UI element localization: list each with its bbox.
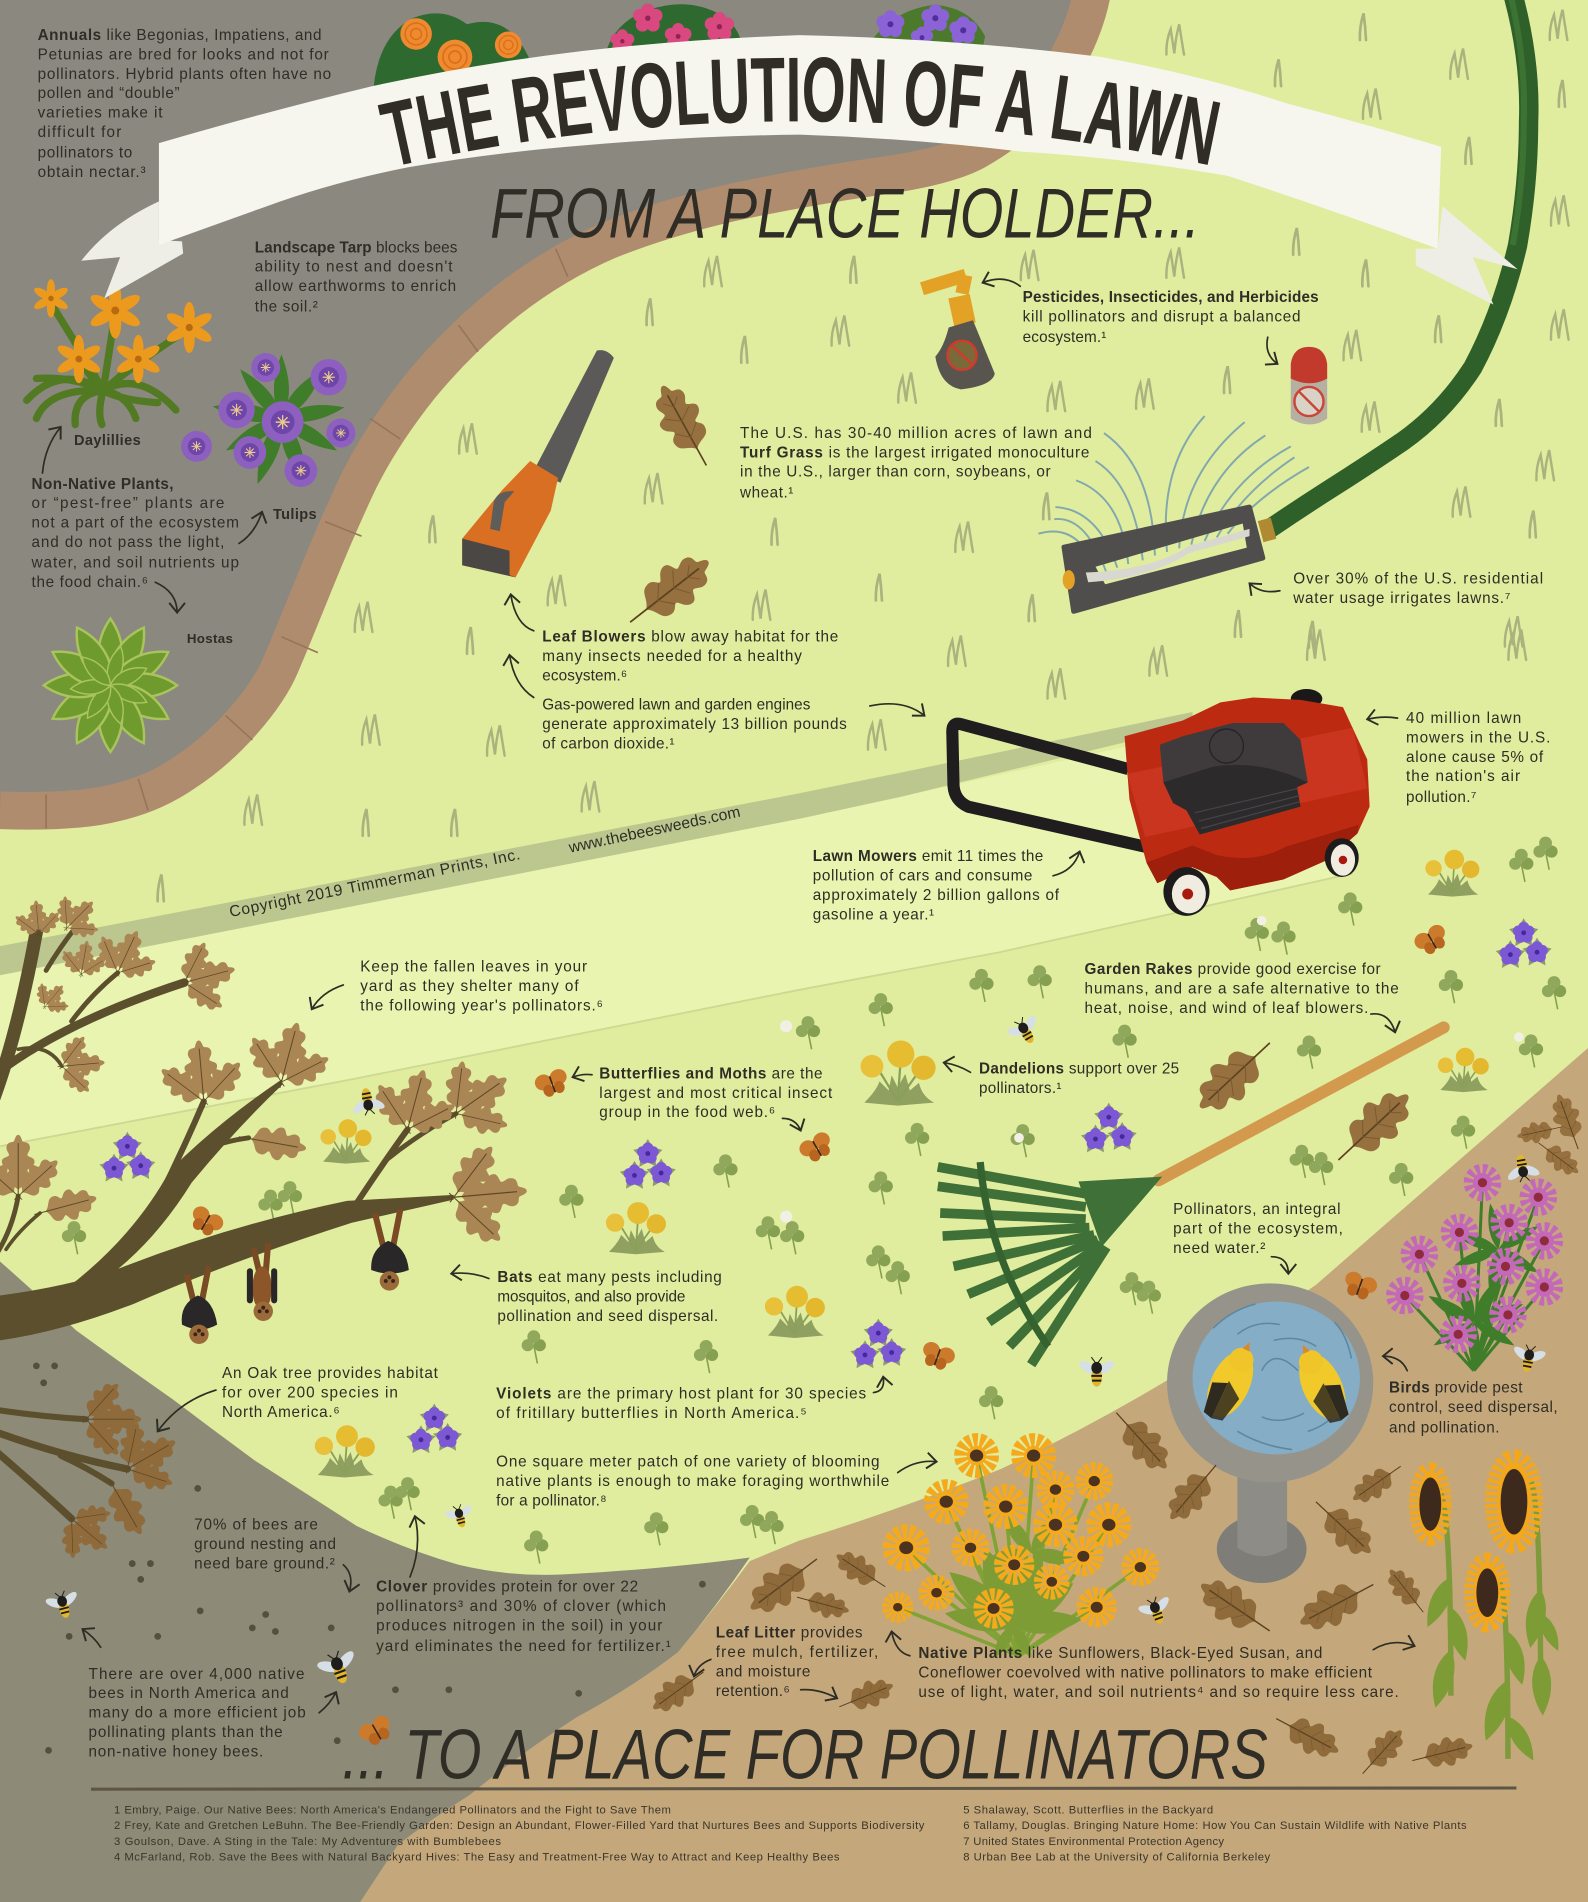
text: gas engines: generate approximately 13 billion pounds	[542, 716, 847, 733]
text: one square meter: for a pollinator.⁸	[496, 1492, 607, 1509]
footnotes right	[963, 1804, 1467, 1864]
text: leaf litter: free mulch, fertilizer,	[716, 1644, 878, 1661]
sunflower one	[1418, 1471, 1442, 1537]
grass tufts	[158, 10, 1569, 901]
icon: daylilies	[27, 279, 214, 425]
copyright text: Copyright 2019 Timmerman Prints, Inc.	[228, 846, 523, 921]
bird right	[1285, 1336, 1356, 1430]
text: pesticides	[1023, 289, 1319, 346]
bird left	[1196, 1334, 1267, 1427]
text: 40 million mowers: 40 million lawn	[1406, 710, 1521, 727]
footnotes left: 4 McFarland, Rob. Save the Bees with Natural Backyard Hives: The Easy and Treatment-Free Way to Attract and Keep Healthy Bees	[114, 1852, 840, 1864]
arrows	[42, 279, 1415, 1713]
text: leaf litter: and moisture	[716, 1663, 810, 1680]
fallen leaves on soil	[645, 1401, 1476, 1783]
text: native plants: Coneflower coevolved with native pollinators to make efficient	[918, 1665, 1373, 1682]
text: annuals: pollinators. Hybrid plants often have no	[38, 66, 331, 83]
tree limbs	[0, 1080, 454, 1340]
text: 40 million mowers: the nation's air	[1406, 768, 1520, 785]
text: landscape tarp: allow earthworms to enrich	[255, 278, 456, 295]
sprinkler knob	[1063, 570, 1075, 590]
text: lawn mowers: pollution of cars and consume	[813, 868, 1032, 885]
text: birds: and pollination.	[1389, 1420, 1499, 1437]
rake crossbar	[980, 1162, 1048, 1346]
text: non-native plants: not a part of the ecosystem	[32, 515, 239, 532]
text: butterflies and moths: largest and most critical insect	[599, 1085, 833, 1102]
text: clover: yard eliminates the need for fertilizer.¹	[376, 1638, 671, 1655]
text: garden rakes: heat, noise, and wind of leaf blowers.	[1085, 1000, 1368, 1017]
text: oak tree: North America.⁶	[222, 1404, 340, 1421]
text: lawn mowers: Lawn Mowers emit 11 times the	[813, 848, 1043, 865]
text: non-native plants: or “pest-free” plants are	[32, 495, 224, 512]
text: turf grass: The U.S. has 30-40 million acres of lawn and	[740, 425, 1092, 442]
text: native bees: There are over 4,000 native	[89, 1666, 304, 1683]
icon: sunflowers	[1418, 1462, 1564, 1764]
icon: purple petunias	[867, 4, 985, 49]
text: leaf litter	[716, 1625, 878, 1700]
label: hostas: Hostas	[187, 631, 233, 646]
text: gas engines: of carbon dioxide.¹	[542, 735, 675, 752]
clover patches	[62, 837, 1566, 1564]
bees	[42, 1011, 1548, 1690]
text: bats: mosquitos, and also provide	[497, 1289, 685, 1306]
rake head	[1078, 1177, 1162, 1247]
text: garden rakes: Garden Rakes provide good exercise for	[1085, 961, 1381, 978]
text: pollinators need water: Pollinators, an integral	[1173, 1201, 1341, 1218]
icon: coneflowers	[1394, 1172, 1555, 1371]
text: annuals: Annuals like Begonias, Impatiens, and	[38, 27, 321, 44]
icon: sprinkler	[1038, 416, 1309, 611]
footnotes left: 1 Embry, Paige. Our Native Bees: North America's Endangered Pollinators and the Fight to Save Them	[114, 1804, 671, 1816]
text: non-native plants	[31, 476, 239, 591]
text: pesticides: kill pollinators and disrupt a balanced	[1023, 308, 1300, 325]
text: pollinators need water: need water.²	[1173, 1240, 1265, 1257]
text: turf grass: in the U.S., larger than corn, soybeans, or	[740, 464, 1051, 481]
text: pollinators need water: part of the ecosystem,	[1173, 1221, 1343, 1238]
footnotes left: 2 Frey, Kate and Gretchen LeBuhn. The Bee-Friendly Garden: Design an Abundant, Flower-Filled Yard that Nurtures Bees and Supports Biodiversity	[114, 1820, 925, 1832]
text: ground nesting: ground nesting and	[194, 1536, 336, 1553]
text: ground nesting	[194, 1517, 336, 1572]
hose connector	[1258, 518, 1276, 542]
text: violets	[496, 1386, 867, 1422]
text: clover: pollinators³ and 30% of clover (which	[376, 1598, 666, 1615]
text: turf grass: wheat.¹	[739, 484, 793, 501]
footer rule	[91, 1788, 1516, 1789]
icon: pink impatiens	[604, 4, 742, 58]
bath pedestal	[1237, 1468, 1287, 1556]
footnotes left: 3 Goulson, Dave. A Sting in the Tale: My Adventures with Bumblebees	[114, 1836, 501, 1848]
text: birds: control, seed dispersal,	[1389, 1399, 1558, 1416]
text: native plants: Native Plants like Sunflowers, Black-Eyed Susan, and	[918, 1645, 1322, 1662]
text: native bees: non-native honey bees.	[89, 1743, 263, 1760]
text: ground nesting: need bare ground.²	[194, 1555, 335, 1572]
label: tulips: Tulips	[273, 507, 317, 523]
icon: oak tree	[0, 882, 534, 1576]
text: leaf blowers: ecosystem.⁶	[542, 667, 627, 684]
text: 40 million mowers: alone cause 5% of	[1406, 749, 1544, 766]
mower path band	[0, 712, 1193, 975]
mower handle	[952, 724, 1145, 847]
text: annuals	[38, 27, 331, 181]
text: gas engines	[542, 697, 847, 752]
text: turf grass	[739, 425, 1092, 501]
text: butterflies and moths: group in the food web.⁶	[599, 1104, 775, 1121]
text: 40 million mowers: pollution.⁷	[1406, 789, 1476, 806]
text: native plants: use of light, water, and soil nutrients⁴ and so require less care.	[918, 1684, 1399, 1701]
text: 40 million mowers	[1406, 710, 1550, 806]
violets	[99, 918, 1552, 1453]
text: non-native plants: water, and soil nutrients up	[31, 555, 239, 572]
text: keep fallen leaves: yard as they shelter many of	[360, 978, 579, 995]
text: gas engines: Gas-powered lawn and garden engines	[542, 697, 811, 714]
website text: www.thebeesweeds.com	[566, 803, 743, 857]
text: butterflies and moths: Butterflies and Moths are the	[599, 1065, 823, 1082]
text: lawn mowers	[813, 848, 1060, 923]
text: annuals: Petunias are bred for looks and not for	[38, 46, 329, 63]
text: turf grass: Turf Grass is the largest irrigated monoculture	[740, 444, 1089, 461]
text: ground nesting: 70% of bees are	[194, 1517, 318, 1534]
text: clover: produces nitrogen in the soil) in your	[376, 1617, 662, 1634]
text: native bees: pollinating plants than the	[89, 1724, 283, 1741]
bath bowl rim	[1167, 1283, 1373, 1482]
icon: bird bath	[1167, 1283, 1373, 1583]
rake tines	[938, 1167, 1106, 1365]
text: annuals: difficult for	[38, 124, 121, 141]
grey bare ground	[0, 1262, 750, 1902]
footnotes right: 8 Urban Bee Lab at the University of California Berkeley	[963, 1852, 1271, 1864]
mower rear wheel	[1325, 838, 1359, 877]
icon: bat two	[250, 1243, 274, 1321]
text: landscape tarp: Landscape Tarp blocks bees	[255, 239, 458, 256]
water jets	[1038, 416, 1309, 575]
grey driveway	[0, 0, 1092, 811]
subtitle: FROM A PLACE HOLDER...	[490, 174, 1200, 253]
closing heading: ... TO A PLACE FOR POLLINATORS	[342, 1714, 1268, 1793]
butterflies	[186, 922, 1452, 1750]
white clover blossoms	[780, 916, 1524, 1223]
text: oak tree: for over 200 species in	[222, 1384, 398, 1401]
text: non-native plants: the food chain.⁶	[32, 574, 148, 591]
text: butterflies and moths	[599, 1065, 833, 1121]
text: clover: Clover provides protein for over 22	[376, 1578, 638, 1595]
garden hose	[1268, 0, 1529, 530]
text: native bees: many do a more efficient job	[89, 1705, 306, 1722]
text: native bees: bees in North America and	[89, 1685, 289, 1702]
text: leaf blowers: Leaf Blowers blow away habitat for the	[542, 629, 838, 646]
footnotes left	[114, 1804, 925, 1864]
text: pollinators need water	[1173, 1201, 1343, 1257]
text: annuals: pollinators to	[38, 145, 132, 162]
text: lawn mowers: approximately 2 billion gallons of	[813, 887, 1060, 904]
mower front wheel	[1163, 867, 1210, 916]
text: birds: Birds provide pest	[1389, 1380, 1523, 1397]
text: oak tree	[222, 1365, 439, 1421]
text: native plants	[918, 1645, 1399, 1701]
text: water usage	[1292, 570, 1543, 607]
icon: lawn mower	[952, 689, 1370, 916]
icon: rose bush	[374, 13, 530, 87]
text: dandelions: pollinators.¹	[979, 1080, 1061, 1097]
text: landscape tarp: the soil.²	[255, 299, 318, 316]
text: landscape tarp: ability to nest and doesn't	[255, 259, 453, 276]
icon: hostas	[44, 619, 177, 752]
plants behind banner	[374, 4, 985, 87]
text: bats: pollination and seed dispersal.	[497, 1308, 718, 1325]
fallen leaves on lawn	[1185, 1027, 1588, 1182]
mower knob	[1291, 689, 1322, 708]
mower body	[1125, 697, 1370, 890]
dandelions	[315, 850, 1489, 1477]
sprinkler frame	[1064, 507, 1263, 611]
text: dandelions	[979, 1061, 1179, 1097]
text: pesticides: ecosystem.¹	[1023, 329, 1106, 346]
text: landscape tarp	[255, 239, 458, 316]
text: violets: Violets are the primary host plant for 30 species	[496, 1386, 867, 1403]
text: birds	[1389, 1380, 1558, 1437]
text: leaf litter: retention.⁶	[716, 1683, 790, 1700]
text: one square meter: native plants is enough to make foraging worthwhile	[496, 1473, 889, 1490]
label: daylillies: Daylillies	[74, 433, 141, 449]
icon: garden rake	[938, 1027, 1444, 1365]
bath base	[1217, 1515, 1307, 1583]
sprinkler bar	[1086, 529, 1250, 582]
icon: spray bottle	[922, 275, 995, 389]
icon: bat one	[182, 1266, 217, 1344]
text: oak tree: An Oak tree provides habitat	[222, 1365, 439, 1382]
leaf on lawn	[644, 376, 725, 476]
lower stripe edge	[0, 873, 1353, 1146]
bath water	[1193, 1302, 1360, 1454]
title banner	[81, 35, 1518, 304]
text: garden rakes: humans, and are a safe alternative to the	[1085, 980, 1399, 997]
text: clover	[376, 1578, 671, 1655]
text: non-native plants: and do not pass the light,	[32, 534, 224, 551]
text: bats	[497, 1269, 722, 1325]
icon: leaf blower	[462, 350, 614, 577]
lower tree leaves	[40, 1376, 197, 1576]
text: annuals: varieties make it	[38, 105, 163, 122]
title: THE REVOLUTION OF A LAWN	[378, 57, 1220, 165]
soil holes of ground-nesting bees	[33, 1362, 706, 1754]
text: lawn mowers: gasoline a year.¹	[813, 906, 934, 923]
icon: black-eyed susans	[888, 1442, 1152, 1660]
text: leaf blowers	[542, 629, 838, 684]
banner main ribbon	[159, 35, 1441, 249]
mower engine cover	[1160, 723, 1308, 835]
text: keep fallen leaves	[360, 959, 603, 1014]
text: leaf blowers: many insects needed for a healthy	[542, 648, 802, 665]
sunflower three	[1474, 1562, 1501, 1623]
leaf on lawn	[616, 543, 722, 641]
text: non-native plants: Non-Native Plants,	[32, 476, 173, 493]
text: keep fallen leaves: the following year's pollinators.⁶	[360, 997, 603, 1014]
tan garden bed	[360, 1048, 1588, 1902]
tree leaves	[0, 882, 534, 1256]
tree branches	[0, 928, 456, 1519]
text: garden rakes	[1085, 961, 1399, 1017]
text: water usage: Over 30% of the U.S. residential	[1293, 570, 1543, 587]
text: 40 million mowers: mowers in the U.S.	[1406, 729, 1550, 746]
text: one square meter: One square meter patch of one variety of blooming	[496, 1454, 880, 1471]
icon: bat three	[371, 1209, 409, 1291]
mown lawn stripe	[0, 746, 1353, 1146]
text: one square meter	[496, 1454, 889, 1509]
footnotes right: 5 Shalaway, Scott. Butterflies in the Backyard	[963, 1804, 1213, 1816]
icon: tulips	[181, 353, 355, 487]
banner right tail	[1416, 206, 1518, 304]
text: violets: of fritillary butterflies in North America.⁵	[496, 1405, 807, 1422]
rake handle	[1159, 1027, 1444, 1180]
footnotes right: 7 United States Environmental Protection Agency	[963, 1836, 1224, 1848]
text: keep fallen leaves: Keep the fallen leaves in your	[360, 959, 587, 976]
text: water usage: water usage irrigates lawns.⁷	[1292, 590, 1510, 607]
footnotes right: 6 Tallamy, Douglas. Bringing Nature Home: How You Can Sustain Wildlife with Native Plants	[963, 1820, 1467, 1832]
text: annuals: obtain nectar.³	[38, 164, 146, 181]
text: bats: Bats eat many pests including	[497, 1269, 722, 1286]
text: native bees	[89, 1666, 306, 1760]
text: annuals: pollen and “double”	[38, 85, 180, 102]
banner left tail	[81, 201, 183, 298]
text: leaf litter: Leaf Litter provides	[716, 1625, 863, 1642]
sunflower two	[1497, 1462, 1531, 1542]
brick edging	[0, 0, 1092, 828]
text: dandelions: Dandelions support over 25	[979, 1061, 1179, 1078]
text: pesticides: Pesticides, Insecticides, and Herbicides	[1023, 289, 1319, 306]
icon: insect spray can	[1291, 347, 1327, 425]
